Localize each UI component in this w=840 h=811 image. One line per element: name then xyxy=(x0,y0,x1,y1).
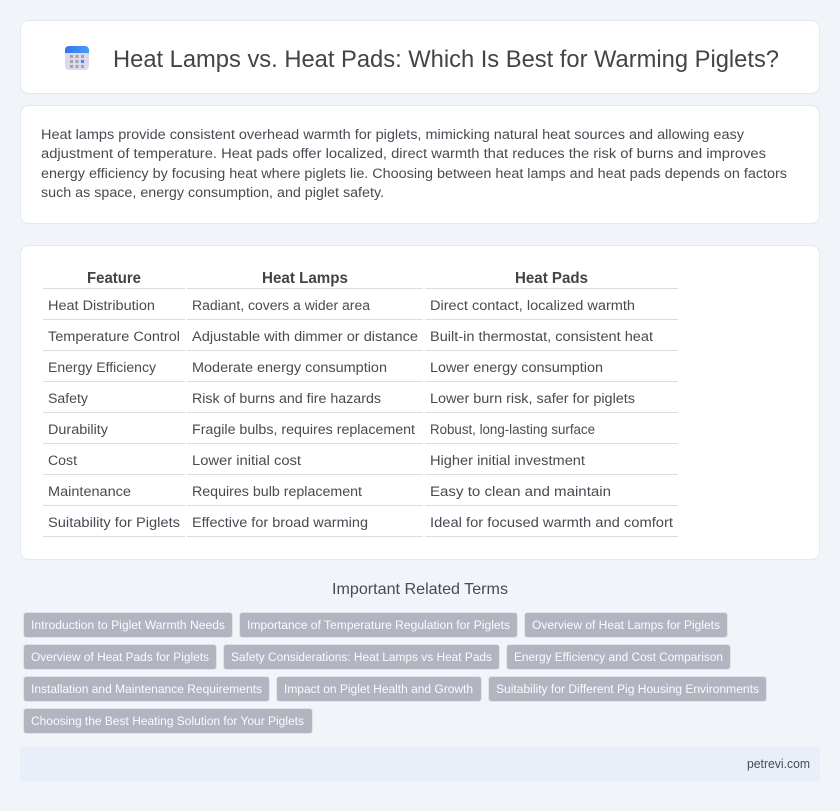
row: suitability for piglets: Effective for broad warming xyxy=(192,515,368,531)
tag: Choosing the Best Heating Solution for Your Piglets xyxy=(31,714,304,728)
table header: Feature xyxy=(87,270,141,287)
row: temperature control: Temperature Control xyxy=(48,329,180,345)
intro text block: energy efficiency by focusing heat where piglets lie. Choosing between heat lamps and heat pads depends on factors xyxy=(41,166,787,182)
row: safety: Risk of burns and fire hazards xyxy=(192,391,381,407)
row: safety xyxy=(48,391,635,407)
row: maintenance: Maintenance xyxy=(48,484,131,500)
row: maintenance: Easy to clean and maintain xyxy=(430,484,611,500)
row: durability: Durability xyxy=(48,422,109,438)
tag xyxy=(240,612,518,638)
row: durability xyxy=(48,422,595,438)
row: temperature control xyxy=(48,329,653,345)
row: temperature control: Built-in thermostat, consistent heat xyxy=(430,329,653,345)
table header xyxy=(87,270,588,287)
row: cost xyxy=(48,453,585,469)
row: heat distribution: Direct contact, localized warmth xyxy=(430,298,635,314)
row: durability: Fragile bulbs, requires replacement xyxy=(192,422,415,438)
row: suitability for piglets: Ideal for focused warmth and comfort xyxy=(430,515,673,531)
row: maintenance xyxy=(48,484,611,500)
row: heat distribution xyxy=(48,298,635,314)
heading: important related terms: Important Related Terms xyxy=(332,581,508,598)
intro text block xyxy=(41,127,787,201)
icon: calendar xyxy=(65,46,89,70)
tag: Overview of Heat Pads for Piglets xyxy=(31,650,209,664)
row: safety: Lower burn risk, safer for piglets xyxy=(430,391,635,407)
row: energy efficiency xyxy=(48,360,603,376)
row: maintenance: Requires bulb replacement xyxy=(192,484,362,500)
tag xyxy=(24,708,312,734)
table rules xyxy=(43,288,678,536)
tag xyxy=(24,644,216,670)
panel: comparison table xyxy=(20,246,820,560)
tag xyxy=(488,676,766,702)
row: heat distribution: Heat Distribution xyxy=(48,298,155,314)
tag xyxy=(24,612,232,638)
intro text block: Heat lamps provide consistent overhead warmth for piglets, mimicking natural heat sources and allowing easy xyxy=(41,127,745,143)
tag: Overview of Heat Lamps for Piglets xyxy=(532,618,720,632)
tag: Impact on Piglet Health and Growth xyxy=(284,682,473,696)
row: temperature control: Adjustable with dimmer or distance xyxy=(192,329,418,345)
row: energy efficiency: Lower energy consumption xyxy=(430,360,603,376)
tag: Energy Efficiency and Cost Comparison xyxy=(514,650,723,664)
row: safety: Safety xyxy=(48,391,89,407)
tag xyxy=(506,644,730,670)
row: cost: Higher initial investment xyxy=(430,453,585,469)
row: cost: Lower initial cost xyxy=(192,453,301,469)
footer xyxy=(20,747,820,781)
tag xyxy=(524,612,728,638)
tag: Safety Considerations: Heat Lamps vs Heat Pads xyxy=(231,650,492,664)
tag xyxy=(276,676,482,702)
tag: Importance of Temperature Regulation for Piglets xyxy=(247,618,510,632)
row: heat distribution: Radiant, covers a wider area xyxy=(192,298,370,314)
tag: Installation and Maintenance Requirements xyxy=(31,682,262,696)
row: suitability for piglets xyxy=(48,515,673,531)
row: energy efficiency: Energy Efficiency xyxy=(48,360,157,376)
panel: introduction xyxy=(20,106,820,224)
row: energy efficiency: Moderate energy consumption xyxy=(192,360,387,376)
row: suitability for piglets: Suitability for Piglets xyxy=(48,515,180,531)
tag xyxy=(224,644,500,670)
table header: Heat Lamps xyxy=(262,270,348,287)
row: durability: Robust, long-lasting surface xyxy=(430,422,595,438)
panel: header xyxy=(20,20,820,94)
intro text block: such as space, energy consumption, and piglet safety. xyxy=(41,185,384,201)
table header: Heat Pads xyxy=(515,270,588,287)
tag: Suitability for Different Pig Housing Environments xyxy=(496,682,759,696)
tag: Introduction to Piglet Warmth Needs xyxy=(31,618,225,632)
tag xyxy=(24,676,270,702)
tag group: related terms xyxy=(24,612,766,734)
row: cost: Cost xyxy=(48,453,77,469)
footer source text: petrevi.com xyxy=(747,757,810,771)
intro text block: adjustment of temperature. Heat pads offer localized, direct warmth that reduces the risk of burns and improves xyxy=(41,146,766,162)
title: Heat Lamps vs. Heat Pads: Which Is Best for Warming Piglets? xyxy=(113,46,779,73)
